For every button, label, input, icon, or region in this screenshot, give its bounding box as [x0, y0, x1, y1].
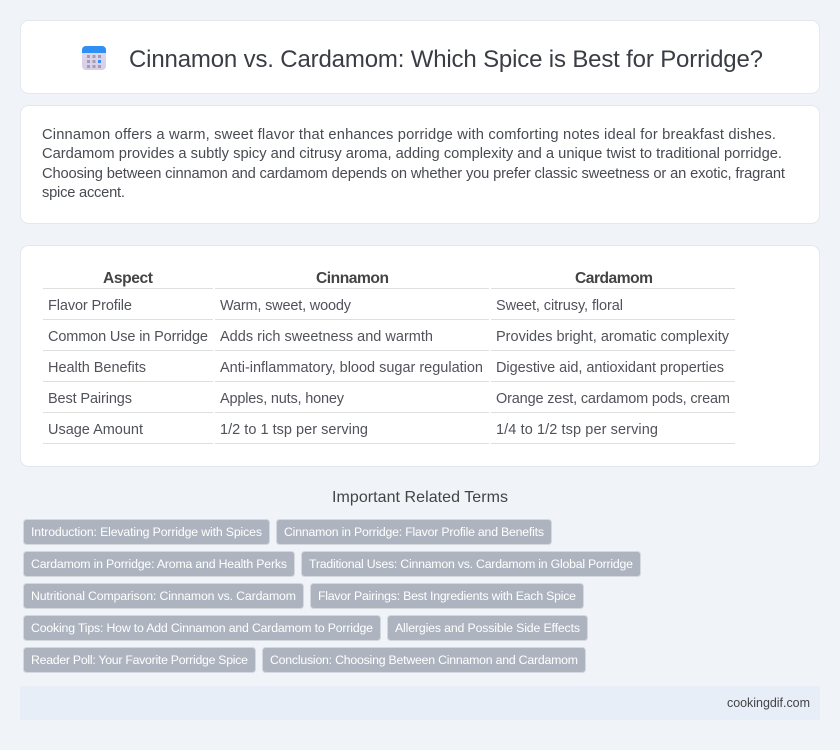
table header: Cardamom [575, 270, 653, 287]
row: usage amount [48, 422, 658, 438]
tags: related terms [24, 520, 640, 672]
row: flavor profile: Sweet, citrusy, floral [496, 298, 623, 314]
tags: related terms: Nutritional Comparison: Cinnamon vs. Cardamom [31, 589, 296, 603]
table header: Cinnamon [316, 270, 389, 287]
row: best pairings: Orange zest, cardamom pods, cream [496, 391, 730, 407]
tags: related terms: Conclusion: Choosing Between Cinnamon and Cardamom [270, 653, 578, 667]
heading: important related terms: Important Related Terms [332, 489, 508, 506]
panel: summary text: Cardamom provides a subtly spicy and citrusy aroma, adding complexity and a unique twist to traditional porridge. [42, 146, 782, 162]
table header [103, 270, 653, 287]
panel: title header [20, 20, 820, 94]
tags: related terms: Allergies and Possible Side Effects [395, 621, 580, 635]
title: Cinnamon vs. Cardamom: Which Spice is Best for Porridge? [129, 46, 763, 73]
tags: related terms: Flavor Pairings: Best Ingredients with Each Spice [318, 589, 576, 603]
icon: calendar [82, 46, 106, 70]
row: best pairings: Apples, nuts, honey [220, 391, 345, 407]
panel: comparison table [20, 246, 820, 466]
tags: related terms: Cooking Tips: How to Add Cinnamon and Cardamom to Porridge [31, 621, 373, 635]
row: health benefits: Health Benefits [48, 360, 146, 376]
row: common use: Provides bright, aromatic complexity [496, 329, 730, 345]
tags: related terms: Reader Poll: Your Favorite Porridge Spice [31, 653, 248, 667]
tags: related terms: Traditional Uses: Cinnamon vs. Cardamom in Global Porridge [309, 557, 633, 571]
panel: summary text: Choosing between cinnamon and cardamom depends on whether you prefer classic sweetness or an exotic, fragrant [42, 166, 785, 182]
row: common use [48, 329, 730, 345]
row: flavor profile [48, 298, 623, 314]
row: health benefits: Digestive aid, antioxidant properties [496, 360, 724, 376]
table header: Aspect [103, 270, 153, 287]
row: best pairings [48, 391, 730, 407]
tags: related terms: Introduction: Elevating Porridge with Spices [31, 525, 262, 539]
row: flavor profile: Flavor Profile [48, 298, 132, 314]
row: usage amount: Usage Amount [48, 422, 143, 438]
panel: summary text [20, 106, 820, 224]
footer [20, 686, 820, 720]
row: usage amount: 1/2 to 1 tsp per serving [220, 422, 368, 438]
row: usage amount: 1/4 to 1/2 tsp per serving [496, 422, 658, 438]
row: common use: Adds rich sweetness and warmth [220, 329, 433, 345]
tags: related terms: Cinnamon in Porridge: Flavor Profile and Benefits [284, 525, 544, 539]
row: flavor profile: Warm, sweet, woody [220, 298, 352, 314]
panel: summary text: Cinnamon offers a warm, sweet flavor that enhances porridge with comforting notes ideal for breakfast dishes. [42, 127, 776, 143]
panel: summary text: spice accent. [42, 185, 125, 201]
tags: related terms: Cardamom in Porridge: Aroma and Health Perks [31, 557, 287, 571]
row: health benefits [48, 360, 724, 376]
row: best pairings: Best Pairings [48, 391, 132, 407]
row: common use: Common Use in Porridge [48, 329, 208, 345]
footer: cookingdif.com [727, 696, 810, 710]
row: health benefits: Anti-inflammatory, blood sugar regulation [220, 360, 483, 376]
